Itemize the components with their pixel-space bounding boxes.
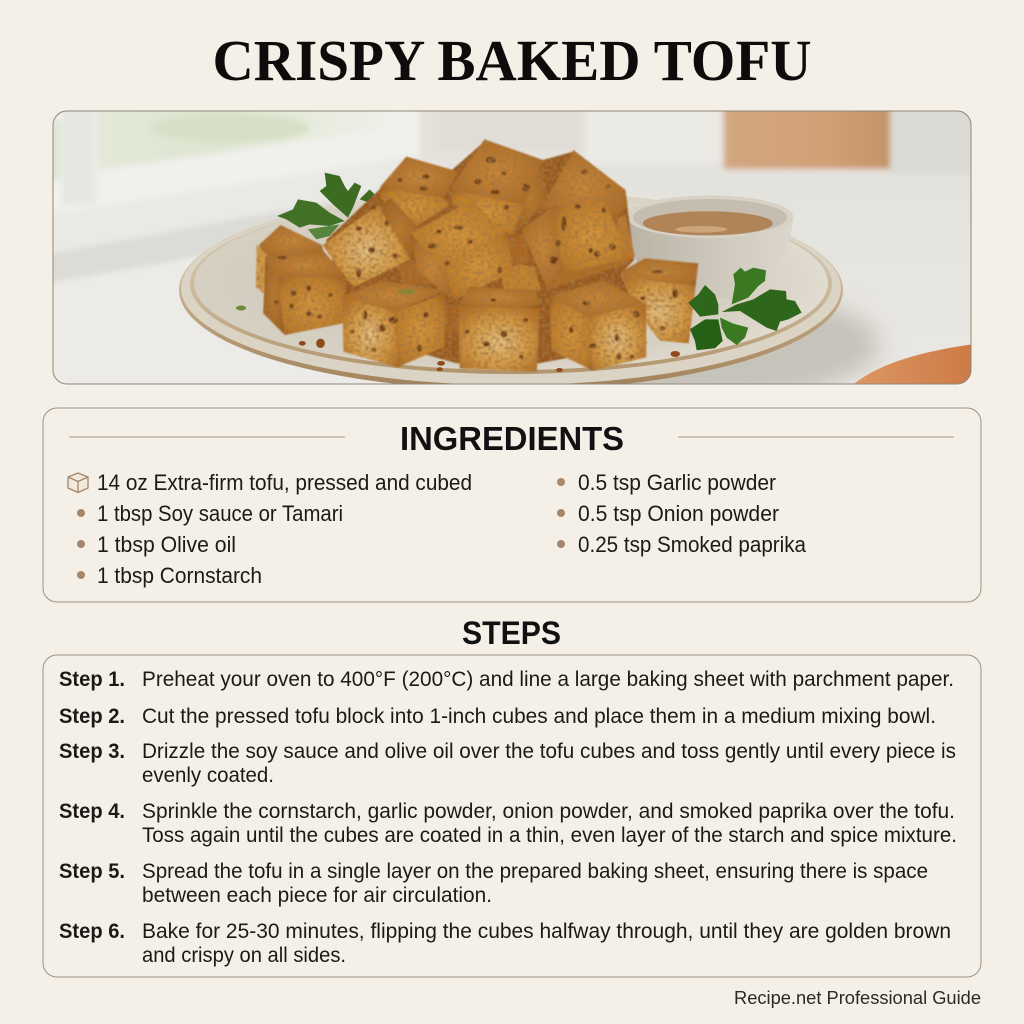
heading: steps: STEPS [462,615,561,651]
parsley right [688,268,802,350]
step 3: Step 3. [59,739,125,763]
crumbs [299,339,680,372]
bullets [77,478,565,579]
front cube [342,281,444,312]
back centre cube [450,139,543,205]
middle left cube [323,205,412,287]
panel: ingredients [43,408,981,602]
kitchen background [54,112,970,384]
step 3: Drizzle the soy sauce and olive oil over the tofu cubes and toss gently until every piece is [142,739,956,763]
step 1: Step 1. [59,667,125,691]
step 6: Step 6. [59,919,125,943]
front right cube [549,280,645,317]
step 4: Step 4. [59,799,125,823]
ingredient: cornstarch: 1 tbsp Cornstarch [97,563,262,588]
ingredient: soy sauce: 1 tbsp Soy sauce or Tamari [97,501,343,526]
far left cube [259,225,324,257]
tofu cubes [256,139,698,372]
heading: ingredients: INGREDIENTS [400,420,624,457]
icon: tofu cube [68,473,88,492]
ingredient: smoked paprika: 0.25 tsp Smoked paprika [578,532,807,557]
plate [179,190,843,390]
far right cube [621,258,698,286]
step 3 [59,739,956,787]
step 6: Bake for 25-30 minutes, flipping the cubes halfway through, until they are golden brown [142,919,951,943]
step 2: Step 2. [59,704,125,728]
centre cube [411,200,506,271]
right centre cube [521,206,562,288]
front centre cube [458,287,540,308]
back right cube [539,150,628,222]
front left cube [265,252,346,278]
plate shadow [630,300,887,384]
ingredient: olive oil: 1 tbsp Olive oil [97,532,236,557]
step 6 [59,919,951,967]
step 5 [59,859,928,907]
ingredient: onion powder: 0.5 tsp Onion powder [578,501,779,526]
photo frame [53,111,971,384]
panel: steps [43,655,981,977]
step 5: Spread the tofu in a single layer on the prepared baking sheet, ensuring there is space [142,859,928,883]
speckles [274,157,678,360]
step 6: and crispy on all sides. [142,943,346,967]
ingredient: tofu: 14 oz Extra-firm tofu, pressed and cubed [97,470,472,495]
step 4: Sprinkle the cornstarch, garlic powder, onion powder, and smoked paprika over the tofu. [142,799,955,823]
step 2: Cut the pressed tofu block into 1-inch cubes and place them in a medium mixing bowl. [142,704,936,728]
orange towel [854,344,970,384]
footer credit: Recipe.net Professional Guide [734,988,981,1008]
step 5: Step 5. [59,859,125,883]
step 5: between each piece for air circulation. [142,883,492,907]
photo: crispy baked tofu on a plate [54,112,970,384]
step 1: Preheat your oven to 400°F (200°C) and line a large baking sheet with parchment paper. [142,667,954,691]
parsley left [277,173,378,239]
back filler cubes [617,215,635,263]
pile backing [326,143,647,363]
step 4: Toss again until the cubes are coated in a thin, even layer of the starch and spice mixture. [142,823,957,847]
title: CRISPY BAKED TOFU [212,28,812,93]
back left cube [380,157,458,198]
step 3: evenly coated. [142,763,274,787]
ingredient: garlic powder: 0.5 tsp Garlic powder [578,470,776,495]
step 4 [59,799,957,847]
dipping bowl [627,195,793,298]
